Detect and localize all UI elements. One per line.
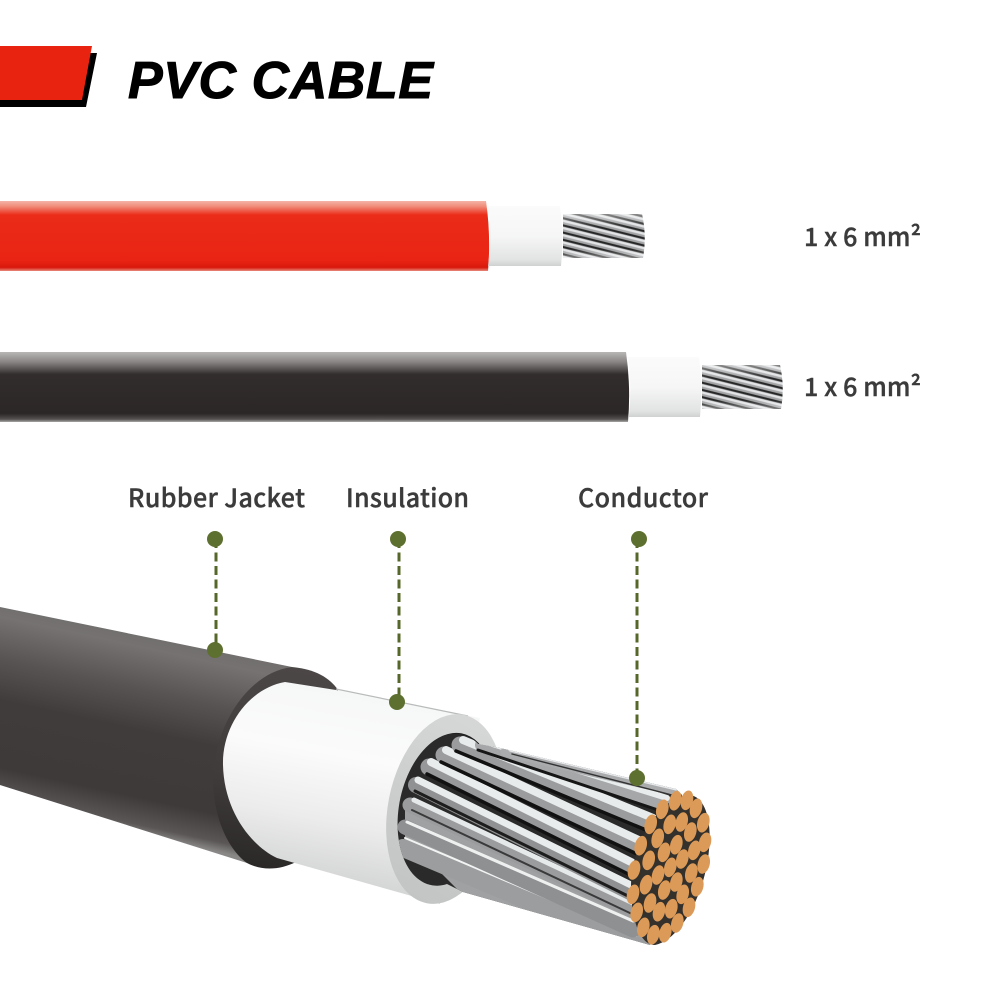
red cable conductor [563, 214, 645, 258]
red cable insulation [488, 206, 562, 266]
top dot [207, 531, 223, 547]
outer jacket [0, 607, 338, 869]
label: rubber jacket: Rubber Jacket [128, 479, 305, 515]
leader line [636, 539, 638, 778]
bottom dot [389, 694, 405, 710]
bottom dot [207, 642, 223, 658]
bottom dot [629, 770, 645, 786]
red jacket [0, 201, 489, 271]
top dot [631, 531, 647, 547]
callout: insulation [346, 479, 469, 710]
conductor strands [398, 734, 682, 945]
insulation end ring [371, 704, 519, 914]
label: conductor: Conductor [578, 479, 709, 515]
header accent bar [0, 46, 97, 107]
cutaway cable illustration [0, 607, 715, 955]
black cable insulation [628, 357, 701, 417]
label: insulation: Insulation [346, 479, 469, 515]
size label: black cable: 1 x 6 mm² [804, 368, 921, 404]
red cable [0, 201, 645, 271]
title: PVC CABLE [128, 52, 434, 110]
leader line [214, 539, 218, 650]
insulation sleeve [223, 682, 519, 914]
copper strand ends [625, 789, 713, 946]
top dot [390, 531, 406, 547]
black cable [0, 352, 783, 422]
size label: red cable: 1 x 6 mm² [804, 218, 921, 254]
black jacket [0, 352, 629, 422]
callout: rubber jacket [128, 479, 305, 658]
black cable conductor [702, 365, 783, 409]
callout: conductor [578, 479, 709, 786]
leader line [398, 539, 400, 702]
